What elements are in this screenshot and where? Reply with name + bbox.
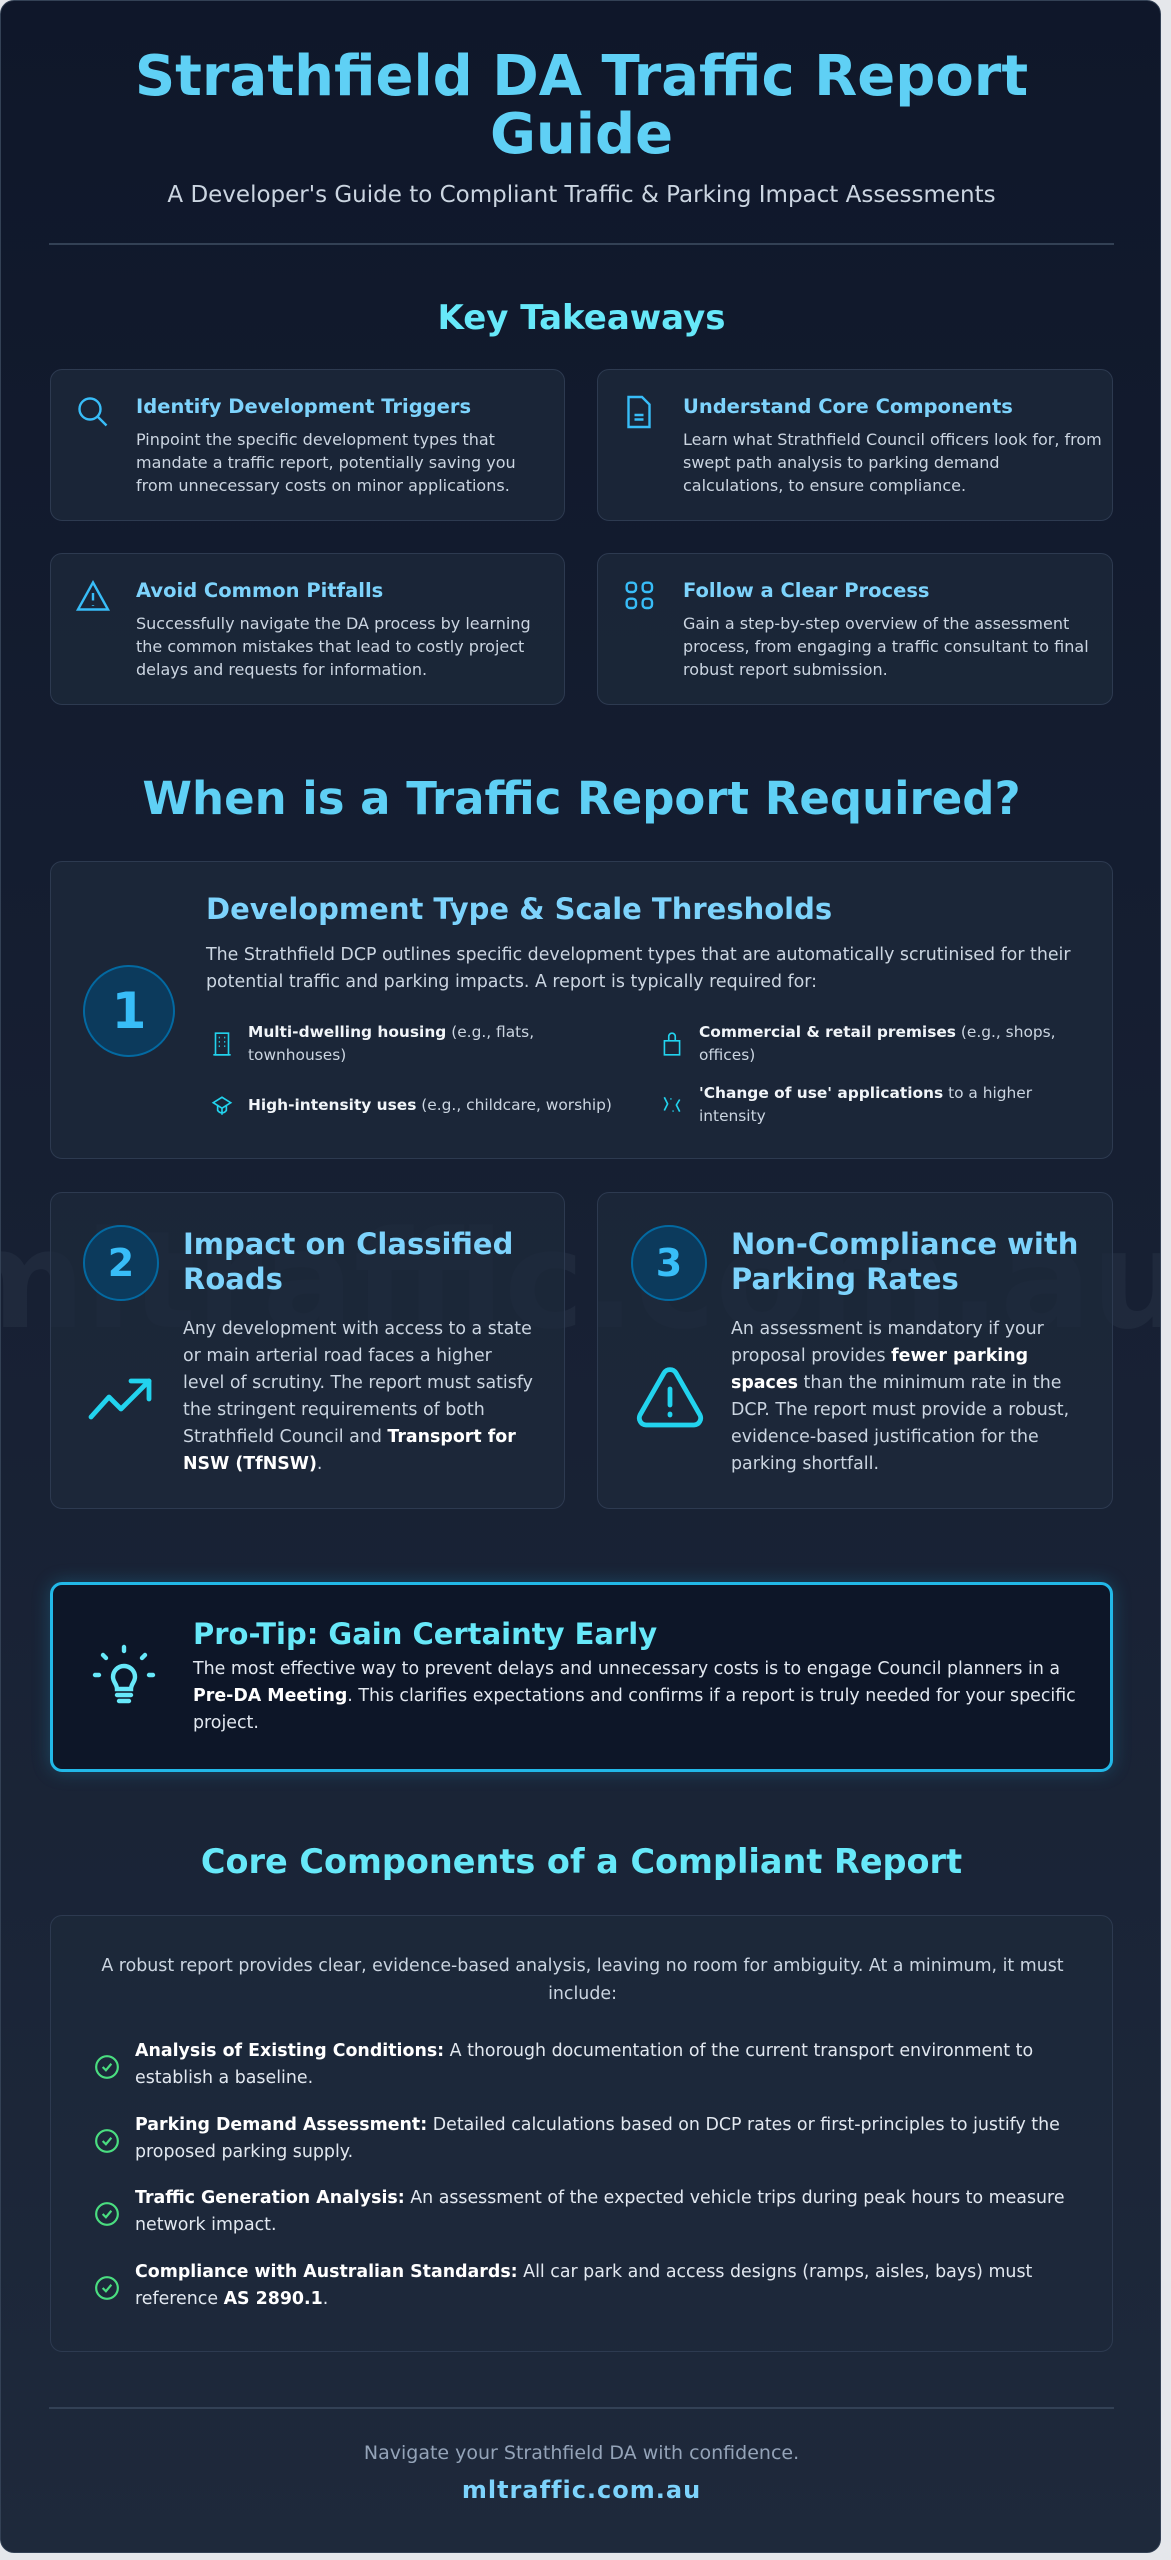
item: change of use: 'Change of use' applications to a higher intensity (699, 1084, 1032, 1125)
item: high-intensity: High-intensity uses (e.g., childcare, worship) (248, 1096, 612, 1114)
pro-tip callout (50, 1582, 1113, 1772)
title: Guide (490, 102, 673, 167)
heading: when required: When is a Traffic Report Required? (142, 772, 1021, 825)
icon: warning (636, 1367, 704, 1428)
title: Strathfield DA Traffic Report (135, 44, 1028, 109)
panel 1: thresholds (50, 861, 1113, 1159)
number 1: 1 (112, 982, 146, 1040)
card: identify triggers: Identify Development Triggers (136, 395, 471, 418)
item: standards: Compliance with Australian Standards: All car park and access designs (ramps, aisles, bays) must reference AS 2890.1. (135, 2262, 1032, 2309)
subtitle: A Developer's Guide to Compliant Traffic & Parking Impact Assessments (167, 182, 996, 208)
panel 2: classified roads: Impact on Classified Roads (183, 1227, 513, 1296)
pro-tip callout: Pro-Tip: Gain Certainty Early (193, 1617, 657, 1651)
panel 3: parking rates: Non-Compliance with Parking Rates (731, 1227, 1078, 1296)
card: process: Follow a Clear Process (683, 579, 930, 602)
number 3 (631, 1225, 707, 1301)
icon: lightbulb (92, 1644, 156, 1704)
item: parking demand: Parking Demand Assessment: Detailed calculations based on DCP rates or first-principles to justify the proposed parking supply. (135, 2115, 1060, 2162)
heading: key takeaways: Key Takeaways (438, 298, 725, 338)
number 3: 3 (656, 1241, 682, 1285)
pro-tip callout: The most effective way to prevent delays and unnecessary costs is to engage Council planners in a Pre-DA Meeting. This clarifies expectations and confirms if a report is truly needed for your specific project. (193, 1659, 1076, 1733)
card: core components (597, 369, 1113, 521)
icon: trending up (88, 1378, 152, 1420)
panel: core components: A robust report provides clear, evidence-based analysis, leaving no room for ambiguity. At a minimum, it must include: (101, 1956, 1064, 2004)
panel 3: parking rates (597, 1192, 1113, 1509)
number 2 (83, 1225, 159, 1301)
panel 2: classified roads: Any development with access to a state or main arterial road faces a higher level of scrutiny. The report must satisfy the stringent requirements of both Strathfield Council and Transport for NSW (TfNSW). (183, 1319, 533, 1474)
panel 1: thresholds: Development Type & Scale Thresholds (206, 892, 832, 926)
card: process (597, 553, 1113, 705)
icon: document (627, 396, 651, 428)
item: traffic generation: Traffic Generation Analysis: An assessment of the expected vehicle trips during peak hours to measure network impact. (135, 2188, 1065, 2235)
card: core components: Learn what Strathfield Council officers look for, from swept path analysis to parking demand calculations, to ensure compliance. (683, 430, 1102, 495)
item: commercial: Commercial & retail premises (e.g., shops, offices) (699, 1023, 1056, 1064)
item: multi-dwelling: Multi-dwelling housing (e.g., flats, townhouses) (248, 1023, 534, 1064)
footer url: mltraffic.com.au (462, 2476, 701, 2504)
icon: warning (76, 580, 110, 611)
card: process: Gain a step-by-step overview of the assessment process, from engaging a traffic consultant to final robust report submission. (683, 614, 1089, 679)
card: pitfalls: Successfully navigate the DA process by learning the common mistakes that lead to costly project delays and requests for information. (136, 614, 531, 679)
panel 3: parking rates: An assessment is mandatory if your proposal provides fewer parking spaces than the minimum rate in the DCP. The report must provide a robust, evidence-based justification for the parking shortfall. (731, 1319, 1069, 1474)
panel 2: classified roads (50, 1192, 565, 1509)
panel 1: thresholds: The Strathfield DCP outlines specific development types that are automatically scrutinised for their potential traffic and parking impacts. A report is typically required for: (206, 945, 1071, 992)
icon: search (78, 397, 108, 426)
card: identify triggers (50, 369, 565, 521)
footer tagline: Navigate your Strathfield DA with confidence. (364, 2442, 799, 2464)
card: core components: Understand Core Components (683, 395, 1013, 418)
icon: grid (625, 582, 654, 610)
item: existing conditions: Analysis of Existing Conditions: A thorough documentation of the current transport environment to establish a baseline. (135, 2041, 1033, 2088)
number 1 (83, 965, 175, 1057)
card: pitfalls (50, 553, 565, 705)
card: pitfalls: Avoid Common Pitfalls (136, 579, 383, 602)
title (135, 44, 1028, 167)
card: identify triggers: Pinpoint the specific development types that mandate a traffic report, potentially saving you from unnecessary costs on minor applications. (136, 430, 516, 495)
heading: core components: Core Components of a Compliant Report (201, 1842, 962, 1881)
number 2: 2 (108, 1241, 134, 1285)
panel: core components (50, 1915, 1113, 2352)
